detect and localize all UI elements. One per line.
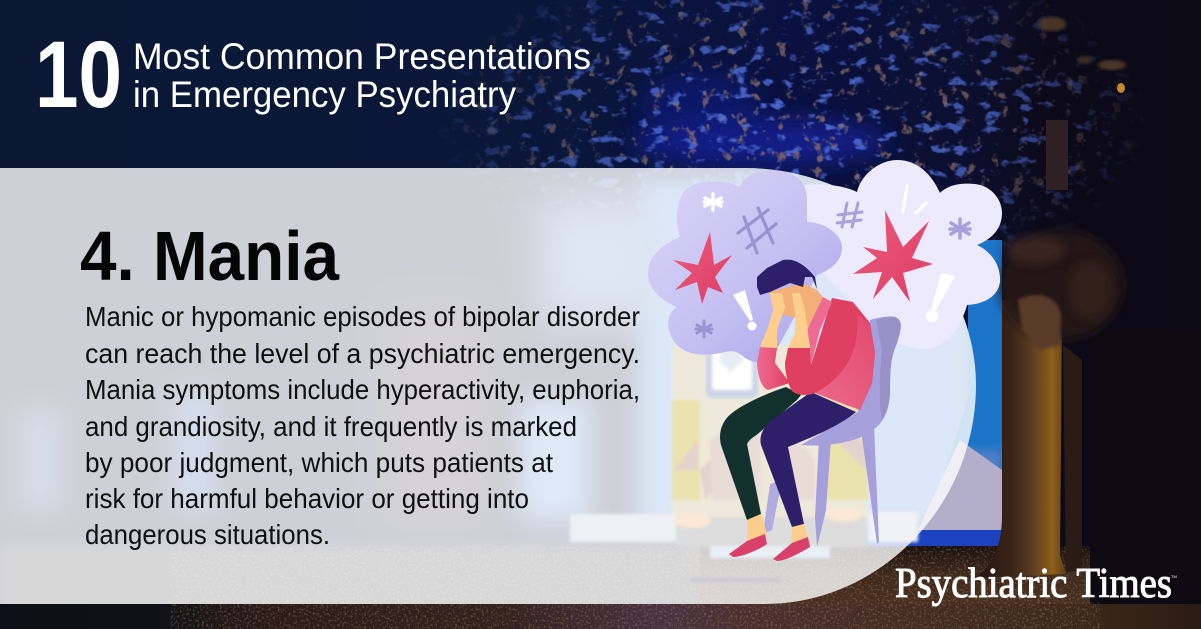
illustration: overwhelmed man with thought clouds	[648, 160, 1002, 561]
title	[35, 22, 591, 128]
hash mark, back cloud	[837, 203, 862, 227]
spark lines, back cloud	[903, 186, 926, 213]
body text: Manic or hypomanic episodes of bipolar disorder	[85, 301, 640, 332]
hands on head	[760, 293, 810, 348]
exclamation mark, back cloud	[926, 273, 955, 322]
body text: by poor judgment, which puts patients at	[85, 447, 553, 478]
front thought cloud	[648, 171, 842, 362]
burst star, front cloud	[673, 232, 732, 304]
asterisk, front cloud top	[704, 194, 722, 210]
translucent panel	[0, 168, 976, 604]
asterisk, front cloud bottom	[696, 321, 712, 337]
ankles	[747, 514, 808, 544]
body text: risk for harmful behavior or getting into	[85, 483, 529, 514]
blue opening behind cloud	[925, 240, 1002, 530]
body text: and grandiosity, and it frequently is marked	[85, 411, 577, 442]
shoes	[729, 534, 810, 561]
back thought cloud	[800, 160, 1002, 349]
body text: can reach the level of a psychiatric emergency.	[85, 338, 640, 369]
hair	[757, 260, 817, 295]
neck and face	[770, 283, 823, 327]
title text: Most Common Presentations	[133, 36, 591, 77]
heading: 4. Mania	[80, 217, 340, 295]
title text	[133, 36, 591, 115]
body text: Mania symptoms include hyperactivity, euphoria,	[85, 374, 640, 405]
exclamation mark, front cloud	[733, 290, 756, 330]
tree trunk	[975, 17, 1126, 578]
sweater	[757, 297, 875, 410]
logo: Psychiatric Times	[895, 561, 1172, 607]
body text	[85, 301, 640, 550]
asterisk, back cloud	[950, 219, 970, 238]
logo: TM	[1171, 574, 1177, 579]
scene seen through panel	[0, 180, 980, 610]
chair	[763, 317, 901, 547]
title text: in Emergency Psychiatry	[133, 74, 516, 115]
faded ambulance in panel	[570, 345, 918, 582]
hash mark, front cloud	[738, 208, 776, 253]
right leg	[760, 392, 856, 527]
burst star, back cloud	[853, 210, 933, 302]
left leg	[720, 387, 801, 520]
ground	[700, 546, 1090, 604]
body text: dangerous situations.	[85, 519, 330, 550]
title number: 10	[35, 22, 122, 128]
